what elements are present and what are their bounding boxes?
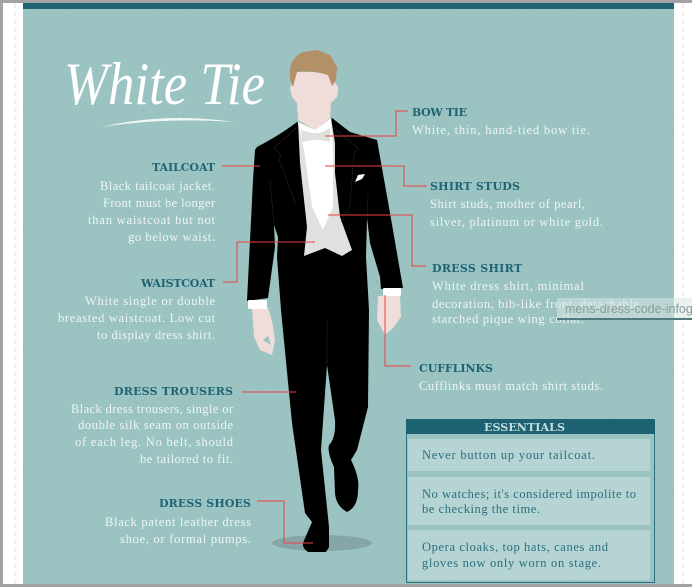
- label: waistcoat: to display dress shirt.: [97, 328, 215, 342]
- shirt: [298, 118, 333, 230]
- label: shirt studs: Shirt studs, mother of pearl,: [430, 197, 585, 211]
- bow tie: [301, 128, 330, 142]
- hands: [252, 296, 401, 355]
- label: dress trousers: Black dress trousers, single or: [71, 402, 234, 416]
- label: cufflinks: [419, 362, 603, 393]
- tip 2: [408, 477, 650, 525]
- label: dress shirt: starched pique wing collar.: [432, 312, 584, 326]
- label: waistcoat: [58, 277, 216, 342]
- suit: jacket and trousers: [247, 118, 403, 552]
- label: dress shirt: [432, 262, 639, 326]
- label: shirt studs: silver, platinum or white gold.: [430, 215, 603, 229]
- label: dress shoes: [105, 497, 251, 546]
- tip 3: Opera cloaks, top hats, canes and: [422, 540, 609, 554]
- tip 2: No watches; it's considered impolite to: [422, 487, 636, 501]
- tip 1: [408, 439, 650, 471]
- hair: [290, 50, 337, 87]
- label: cufflinks: Cufflinks must match shirt studs.: [419, 379, 603, 393]
- tip 1: Never button up your tailcoat.: [422, 448, 595, 462]
- pocket square: [355, 174, 365, 182]
- label: bow tie: [412, 106, 590, 137]
- label: dress shoes: Black patent leather dress: [105, 515, 251, 529]
- label: tailcoat: [88, 161, 216, 244]
- label: bow tie: White, thin, hand-tied bow tie.: [412, 123, 590, 137]
- tip 2: be checking the time.: [422, 502, 540, 516]
- label: dress shirt: White dress shirt, minimal: [432, 279, 585, 293]
- essentials heading: [406, 419, 655, 434]
- label: tailcoat: than waistcoat but not: [88, 213, 216, 227]
- label: cufflinks: CUFFLINKS: [419, 362, 493, 375]
- cuffs: [248, 300, 267, 309]
- label: tailcoat: TAILCOAT: [152, 161, 216, 174]
- label: tailcoat: Black tailcoat jacket.: [100, 179, 215, 193]
- label: waistcoat: WAISTCOAT: [140, 277, 216, 290]
- title: White Tie: [64, 51, 265, 117]
- label: dress shirt: DRESS SHIRT: [432, 262, 523, 275]
- label: dress trousers: [71, 385, 234, 466]
- label: dress trousers: of each leg. No belt, should: [75, 435, 234, 449]
- neck and face: [290, 72, 338, 130]
- pointer lines: [222, 111, 427, 543]
- label: dress shoes: shoe, or formal pumps.: [120, 532, 251, 546]
- label: shirt studs: [430, 180, 603, 229]
- label: bow tie: BOW TIE: [412, 106, 467, 119]
- label: tailcoat: Front must be longer: [103, 196, 216, 210]
- tip 3: [408, 530, 650, 580]
- label: waistcoat: breasted waistcoat. Low cut: [58, 311, 216, 325]
- tip 3: gloves now only worn on stage.: [422, 556, 601, 570]
- label: tailcoat: go below waist.: [128, 230, 215, 244]
- label: dress trousers: DRESS TROUSERS: [114, 385, 233, 398]
- label: dress shoes: DRESS SHOES: [159, 497, 251, 510]
- tooltip overlay: [557, 298, 692, 320]
- tooltip overlay: mens-dress-code-infog: [565, 302, 692, 316]
- figure: man in white tie: [247, 50, 403, 552]
- label: dress shirt: decoration, bib-like front, detachable: [432, 297, 639, 311]
- panel: essentials: [406, 419, 655, 582]
- essentials heading: ESSENTIALS: [484, 420, 565, 434]
- label: dress trousers: be tailored to fit.: [140, 452, 233, 466]
- label: shirt studs: SHIRT STUDS: [430, 180, 520, 193]
- label: dress trousers: double silk seam on outside: [78, 418, 233, 432]
- label: waistcoat: White single or double: [85, 294, 215, 308]
- waistcoat: [298, 118, 352, 256]
